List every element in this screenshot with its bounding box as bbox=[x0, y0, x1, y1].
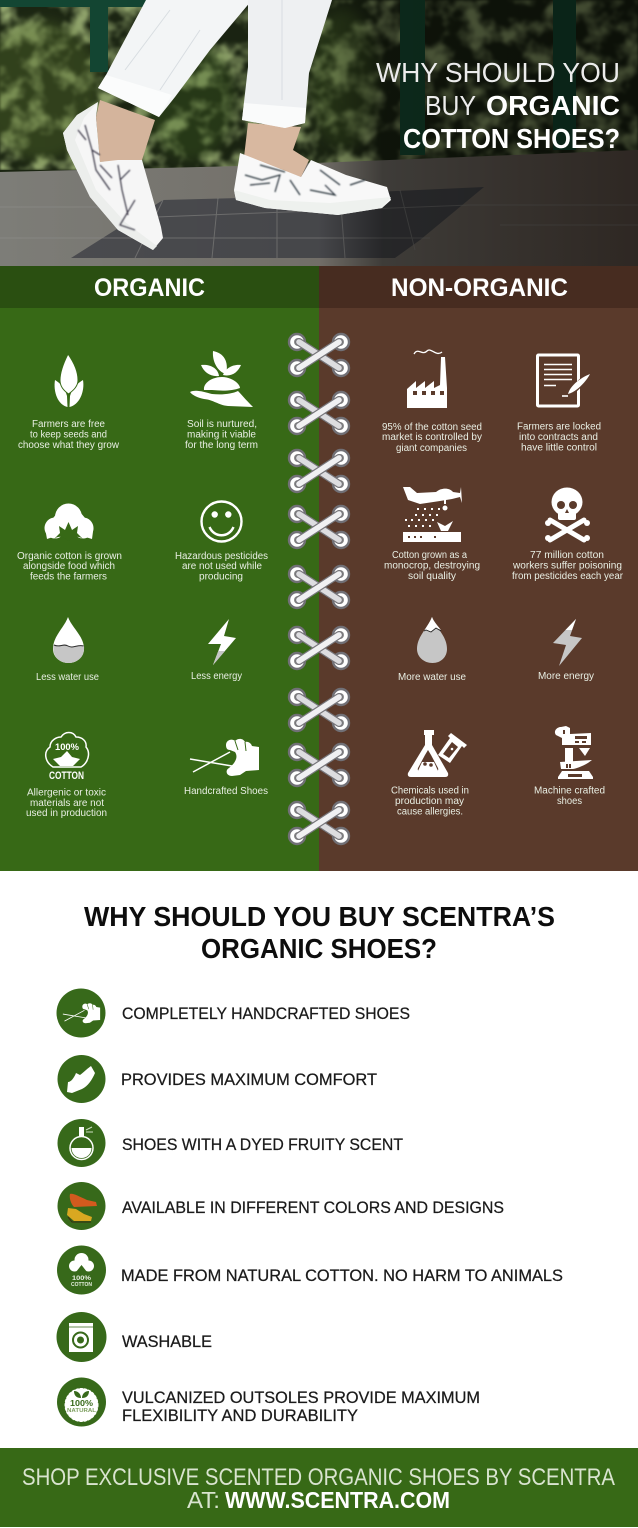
title bbox=[376, 57, 620, 154]
item: more energy: More energy bbox=[538, 671, 594, 682]
icon: cotton boll bbox=[44, 504, 94, 541]
item: allergenic materials: Allergenic or toxic bbox=[27, 788, 106, 798]
item: cotton seed market: 95% of the cotton seed bbox=[382, 422, 482, 433]
item: hazardous pesticides: are not used while bbox=[182, 561, 262, 572]
item: machine crafted: Machine crafted bbox=[534, 786, 605, 796]
item: farmers locked: into contracts and bbox=[519, 432, 598, 443]
item: monocrop: monocrop, destroying bbox=[384, 560, 480, 572]
icon: smiley bbox=[202, 502, 242, 542]
item: farmers free: choose what they grow bbox=[18, 440, 120, 451]
hero photo: shoes on pavement bbox=[0, 0, 638, 266]
icon: water drop mostly white bbox=[53, 617, 84, 663]
header: organic bbox=[0, 266, 319, 308]
benefit: washable bbox=[56, 1312, 212, 1362]
item: machine crafted: shoes bbox=[557, 796, 582, 807]
benefit: handcrafted: COMPLETELY HANDCRAFTED SHOES bbox=[122, 1004, 410, 1023]
item: allergenic materials: materials are not bbox=[30, 798, 104, 809]
item: soil nurtured bbox=[185, 351, 258, 451]
icon: 100% natural badge: NATURAL bbox=[67, 1408, 97, 1414]
panel: non-organic bbox=[319, 308, 638, 871]
item: more water: More water use bbox=[398, 672, 466, 683]
item: farmers locked bbox=[517, 355, 601, 454]
item: soil nurtured: Soil is nurtured, bbox=[187, 419, 257, 430]
item: organic cotton: alongside food which bbox=[23, 561, 115, 572]
item: handcrafted: Handcrafted Shoes bbox=[184, 786, 268, 797]
heading: why buy Scentra: ORGANIC SHOES? bbox=[201, 933, 437, 964]
icon: factory bbox=[407, 350, 447, 408]
shoe: right, marble print bbox=[234, 153, 391, 215]
item: farmers free bbox=[18, 354, 120, 451]
icon: chemical flasks bbox=[408, 730, 467, 777]
item: monocrop bbox=[384, 487, 480, 582]
item: monocrop: Cotton grown as a bbox=[392, 550, 467, 561]
item: monocrop: soil quality bbox=[408, 571, 456, 582]
shoe: left, marble print bbox=[63, 102, 163, 250]
item: farmers locked: have little control bbox=[521, 442, 597, 454]
item: farmers free: to keep seeds and bbox=[30, 430, 107, 440]
item: hazardous pesticides bbox=[175, 502, 268, 582]
item: chemicals: Chemicals used in bbox=[391, 786, 469, 796]
benefit: comfort: PROVIDES MAXIMUM COMFORT bbox=[121, 1070, 377, 1089]
item: handcrafted bbox=[184, 739, 268, 797]
item: workers poisoning: from pesticides each year bbox=[512, 571, 624, 582]
item: less energy bbox=[191, 619, 242, 682]
legs and white trousers bbox=[96, 0, 332, 177]
item: farmers free: Farmers are free bbox=[32, 419, 105, 430]
benefit: comfort bbox=[58, 1055, 377, 1103]
dark gradient behind title bbox=[0, 0, 638, 266]
icon: coloured shoes badge bbox=[58, 1182, 106, 1230]
item: soil nurtured: for the long term bbox=[185, 440, 258, 451]
icon: leaf bbox=[55, 354, 83, 407]
icon: hand with scissors bbox=[190, 739, 259, 776]
icon: 100% natural badge bbox=[57, 1378, 106, 1426]
title: ORGANIC bbox=[486, 90, 620, 121]
icon: cotton badge bbox=[57, 1246, 106, 1294]
heading: why buy Scentra: WHY SHOULD YOU BUY SCENTRA’S bbox=[84, 901, 555, 932]
benefit: outsoles: VULCANIZED OUTSOLES PROVIDE MAXIMUM bbox=[122, 1388, 480, 1407]
icon: 100% cotton badge: COTTON bbox=[49, 770, 84, 782]
benefit: scent bbox=[58, 1119, 403, 1167]
pavement with dark tiles bbox=[0, 150, 638, 266]
icon: 100% cotton badge bbox=[46, 732, 88, 782]
header: non-organic bbox=[319, 266, 638, 308]
benefit: scent: SHOES WITH A DYED FRUITY SCENT bbox=[122, 1135, 403, 1154]
item: chemicals bbox=[391, 730, 469, 818]
benefit: colours: AVAILABLE IN DIFFERENT COLORS AND DESIGNS bbox=[122, 1198, 504, 1217]
foliage background bbox=[0, 0, 638, 170]
item: workers poisoning: 77 million cotton bbox=[530, 550, 604, 561]
item: workers poisoning: workers suffer poisoning bbox=[512, 560, 622, 572]
item: more energy bbox=[538, 619, 594, 682]
icon: perfume badge bbox=[58, 1119, 106, 1167]
icon: cotton badge: 100% bbox=[72, 1275, 91, 1282]
item: cotton seed market: market is controlled by bbox=[382, 432, 482, 443]
item: less water bbox=[36, 617, 99, 683]
shoelaces down the centre seam bbox=[289, 334, 349, 844]
icon: lightning bolt white bbox=[208, 619, 236, 665]
benefit: outsoles: FLEXIBILITY AND DURABILITY bbox=[122, 1406, 358, 1425]
icon: hand with plant bbox=[190, 351, 253, 407]
footer call to action bbox=[0, 1448, 638, 1527]
item: machine crafted bbox=[534, 726, 605, 807]
item: allergenic materials: used in production bbox=[26, 808, 107, 819]
icon: contract and pen bbox=[538, 355, 591, 406]
header: non-organic: NON-ORGANIC bbox=[391, 274, 568, 302]
icon: handcrafted badge bbox=[56, 988, 106, 1038]
footer call to action: WWW.SCENTRA.COM bbox=[225, 1487, 450, 1513]
item: hazardous pesticides: producing bbox=[199, 572, 243, 582]
benefit: outsoles bbox=[57, 1378, 480, 1426]
icon: lightning bolt gray bbox=[553, 619, 582, 666]
item: soil nurtured: making it viable bbox=[187, 430, 256, 440]
icon: crop duster plane bbox=[403, 487, 462, 542]
item: farmers locked: Farmers are locked bbox=[517, 422, 601, 432]
icon: water drop mostly gray bbox=[417, 617, 447, 663]
item: workers poisoning bbox=[512, 488, 624, 582]
title: BUY bbox=[425, 90, 476, 121]
icon: 100% natural badge: 100% bbox=[70, 1399, 93, 1408]
footer call to action: AT: bbox=[187, 1487, 220, 1513]
title: WHY SHOULD YOU bbox=[376, 57, 620, 88]
icon: washing machine badge bbox=[56, 1312, 106, 1362]
item: chemicals: production may bbox=[395, 796, 464, 807]
icon: sewing machine bbox=[555, 726, 593, 779]
icon: shoe badge bbox=[58, 1055, 106, 1103]
benefit: natural cotton: MADE FROM NATURAL COTTON. NO HARM TO ANIMALS bbox=[121, 1266, 563, 1285]
header: organic: ORGANIC bbox=[94, 274, 205, 302]
title: COTTON SHOES? bbox=[403, 123, 620, 154]
item: less water: Less water use bbox=[36, 672, 99, 683]
benefit: natural cotton bbox=[57, 1246, 563, 1294]
item: cotton seed market bbox=[382, 350, 482, 454]
item: organic cotton: Organic cotton is grown bbox=[17, 551, 122, 562]
item: organic cotton: feeds the farmers bbox=[30, 572, 107, 582]
panel: organic bbox=[0, 308, 319, 871]
heading: why buy Scentra bbox=[84, 901, 555, 964]
benefit: colours bbox=[58, 1182, 504, 1230]
item: allergenic materials bbox=[26, 732, 107, 819]
item: chemicals: cause allergies. bbox=[397, 806, 463, 818]
item: hazardous pesticides: Hazardous pesticides bbox=[175, 551, 268, 562]
icon: cotton badge: COTTON bbox=[71, 1282, 92, 1288]
item: organic cotton bbox=[17, 504, 122, 582]
item: more water bbox=[398, 617, 466, 683]
icon: 100% cotton badge: 100% bbox=[55, 742, 80, 753]
item: less energy: Less energy bbox=[191, 671, 242, 682]
item: cotton seed market: giant companies bbox=[396, 443, 467, 454]
benefit: handcrafted bbox=[56, 988, 410, 1038]
icon: skull and crossbones bbox=[545, 488, 590, 541]
benefit: washable: WASHABLE bbox=[122, 1332, 212, 1351]
